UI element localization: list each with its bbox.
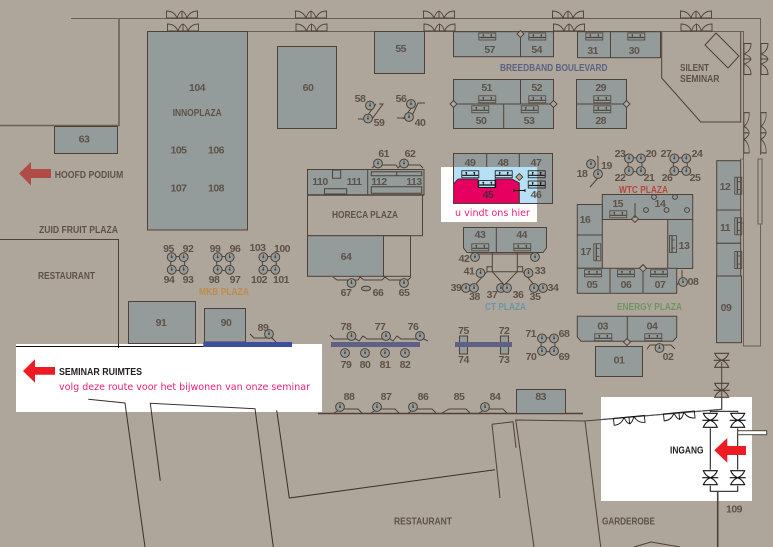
cluster 92 to 95: 92 — [183, 243, 194, 255]
stands 76 to 82: 80 — [360, 359, 371, 371]
cluster 100 to 103: 102 — [251, 274, 268, 286]
cluster 96 to 99: 99 — [210, 243, 221, 255]
stands 58 and 59: 58 — [355, 93, 366, 105]
stand: Innoplaza — [148, 32, 248, 230]
stands 65 66 67: 66 — [373, 287, 384, 299]
arrow: ingang — [714, 438, 746, 463]
stands 57 and 54: 54 — [531, 44, 543, 56]
stands 29 and 28: 29 — [595, 82, 607, 94]
stands 72 to 75: 75 — [458, 325, 469, 337]
stands 72 to 75: 72 — [499, 325, 510, 337]
label: breedband boulevard: BREEDBAND BOULEVARD — [500, 62, 608, 74]
CT plaza stands 33 to 42: 41 — [464, 266, 475, 278]
cluster 68 to 71: 71 — [525, 328, 537, 340]
WTC plaza stands 13 to 17: 17 — [580, 246, 592, 258]
cluster 92 to 95: 95 — [163, 243, 174, 255]
CT plaza stands 33 to 42: 34 — [548, 282, 559, 294]
CT plaza stands 33 to 42: 42 — [459, 253, 470, 265]
cluster 96 to 99: 97 — [230, 274, 241, 286]
WTC plaza stands 13 to 17: 16 — [580, 214, 591, 226]
stands 29 and 28: 28 — [595, 115, 607, 127]
stands 45 to 49 block: 47 — [531, 157, 542, 169]
cluster 68 to 71 — [525, 328, 570, 363]
CT plaza stands 33 to 42: 38 — [469, 291, 480, 303]
stands 76 to 82 — [330, 321, 428, 371]
stands 57 and 54: 57 — [484, 44, 496, 56]
cluster 20 to 23: 22 — [615, 172, 626, 184]
label: ingang: INGANG — [670, 445, 704, 457]
label: CT plaza: CT PLAZA — [485, 301, 526, 313]
stands 58 and 59 — [355, 93, 385, 129]
stands 72 to 75 — [455, 325, 512, 366]
entrance structure — [613, 411, 767, 491]
stands 18 and 19: 18 — [577, 168, 588, 180]
cluster 96 to 99 — [209, 243, 241, 286]
cluster 100 to 103: 100 — [274, 243, 291, 255]
stands 45 to 49 block: 45 — [483, 189, 494, 201]
stands 72 to 75: 74 — [458, 354, 469, 366]
stand 01: 01 — [614, 354, 625, 366]
silent seminar room: SEMINAR — [680, 73, 720, 85]
stands 03 and 04 — [577, 316, 677, 346]
revolving doors right side — [744, 43, 768, 154]
panel: ingang white highlight — [601, 397, 752, 501]
route walls below seminar panel — [88, 399, 495, 547]
cluster 20 to 23: 20 — [646, 148, 657, 160]
stands 18 and 19: 19 — [601, 160, 612, 172]
label: seminar ruimtes: SEMINAR RUIMTES — [59, 366, 142, 378]
stands 84 to 88 — [334, 391, 507, 413]
stands 110 to 113 strip — [308, 170, 424, 195]
CT plaza stands 33 to 42: 37 — [487, 289, 498, 301]
stands 45 to 49 block — [454, 154, 552, 204]
stand: Innoplaza: 104 — [189, 82, 206, 94]
stands 65 66 67: 65 — [399, 287, 410, 299]
stands 110 to 113 strip: 113 — [406, 176, 422, 188]
stand 55 — [374, 32, 424, 74]
stands 76 to 82: 76 — [408, 321, 419, 333]
WTC plaza stands 13 to 17: 15 — [612, 198, 624, 210]
stands 09 to 12 column: 12 — [720, 181, 731, 193]
white panel: seminar ruimtes — [16, 344, 322, 412]
stand 63: 63 — [79, 134, 90, 146]
Horeca plaza: HORECA PLAZA — [332, 209, 398, 221]
stands 50 51 52 53: 52 — [531, 82, 543, 94]
cluster 24 to 27: 25 — [690, 172, 701, 184]
stand: Innoplaza: 106 — [208, 144, 225, 156]
cluster 100 to 103: 101 — [273, 274, 290, 286]
stand 64: 64 — [341, 251, 352, 263]
panel: stand 45 white highlight — [441, 167, 537, 222]
cluster 92 to 95: 94 — [164, 274, 175, 286]
stand: Innoplaza: 107 — [170, 182, 187, 194]
stand 55: 55 — [395, 43, 407, 55]
stands 05 06 07: 06 — [621, 279, 632, 291]
stands 58 and 59: 59 — [374, 117, 385, 129]
stands 05 06 07 — [577, 265, 677, 293]
CT plaza stands 33 to 42: 35 — [530, 291, 541, 303]
label: energy plaza: ENERGY PLAZA — [617, 301, 682, 313]
stand 01 — [596, 346, 642, 376]
stand 60 — [278, 46, 336, 128]
cluster 20 to 23 — [615, 148, 657, 184]
label: restaurant south: RESTAURANT — [394, 515, 452, 527]
stands 05 06 07: 05 — [587, 279, 598, 291]
stands 45 to 49 block: 49 — [465, 157, 476, 169]
stands 84 to 88: 88 — [344, 391, 355, 403]
stands 61 and 62: 61 — [378, 148, 390, 160]
entrance doors grey — [714, 353, 730, 397]
stands 43 and 44: 43 — [475, 229, 486, 241]
cluster 20 to 23: 23 — [615, 148, 626, 160]
label: MKB plaza: MKB PLAZA — [199, 286, 249, 298]
stands 18 and 19 — [577, 156, 612, 187]
stand: Innoplaza: 105 — [170, 144, 187, 156]
label: garderobe: GARDEROBE — [602, 515, 655, 527]
cluster 24 to 27 — [661, 148, 703, 184]
stands 110 to 113 strip: 112 — [371, 176, 387, 188]
stands 65 66 67: 67 — [341, 287, 352, 299]
blue bar at stand 90 — [203, 342, 292, 347]
CT plaza stands 33 to 42 — [451, 253, 559, 303]
cluster 92 to 95: 93 — [183, 274, 194, 286]
stand 109 corridor: 109 — [726, 504, 743, 516]
stand 08: 08 — [688, 276, 699, 288]
entrance wall line over white panel — [601, 397, 722, 420]
stand 89 — [250, 322, 276, 342]
black wall line over panel — [16, 344, 204, 348]
stands 09 to 12 column: 09 — [721, 302, 732, 314]
stand 45 highlighted — [454, 179, 519, 204]
stands 84 to 88: 85 — [454, 391, 465, 403]
stands 09 to 12 column — [716, 161, 742, 343]
label: seminar route hint: volg deze route voor het bijwonen van onze seminar — [59, 382, 310, 393]
stand 83 — [516, 390, 566, 414]
stands 110 to 113 strip: 110 — [312, 176, 328, 188]
silent seminar room: SILENT — [680, 62, 709, 74]
cluster 24 to 27: 26 — [662, 172, 673, 184]
stands 76 to 82: 78 — [341, 321, 352, 333]
stand 91 — [128, 302, 196, 344]
Horeca plaza — [308, 195, 422, 236]
stands 05 06 07: 07 — [655, 279, 666, 291]
cluster 68 to 71: 69 — [559, 351, 570, 363]
stands 29 and 28 — [576, 80, 630, 128]
cluster 24 to 27: 27 — [661, 148, 672, 160]
cluster 24 to 27: 24 — [692, 148, 703, 160]
stands 76 to 82: 81 — [380, 359, 391, 371]
stands 57 and 54 — [454, 30, 554, 57]
stands 76 to 82: 77 — [375, 321, 386, 333]
stand: Innoplaza: 108 — [208, 182, 225, 194]
label: zuid fruit plaza: ZUID FRUIT PLAZA — [39, 224, 118, 236]
stand 60: 60 — [303, 82, 314, 94]
WTC plaza stands 13 to 17 — [577, 194, 693, 272]
stand 91: 91 — [156, 317, 167, 329]
stand 90 — [204, 308, 246, 342]
cluster 68 to 71: 68 — [559, 328, 570, 340]
stands 03 and 04: 03 — [597, 320, 609, 332]
CT plaza stands 33 to 42: 39 — [451, 282, 462, 294]
label: hoofd podium: HOOFD PODIUM — [55, 169, 123, 181]
stands 56 and 40: 40 — [415, 117, 426, 129]
stands 31 and 30: 31 — [587, 45, 599, 57]
stand 90: 90 — [221, 317, 232, 329]
stands 50 51 52 53: 51 — [481, 82, 493, 94]
CT plaza stands 33 to 42: 33 — [535, 265, 546, 277]
WTC plaza stands 13 to 17: 14 — [655, 198, 666, 210]
revolving doors top row — [166, 11, 712, 31]
arrow: seminar route — [23, 359, 55, 383]
stands 84 to 88: 87 — [381, 391, 392, 403]
stand 109 corridor — [718, 491, 743, 547]
stand 83: 83 — [535, 391, 547, 403]
stands 09 to 12 column: 11 — [720, 222, 731, 234]
label: WTC plaza: WTC PLAZA — [619, 184, 668, 196]
stands 76 to 82: 79 — [341, 359, 352, 371]
cluster 20 to 23: 21 — [644, 172, 655, 184]
cluster 68 to 71: 70 — [526, 351, 537, 363]
stands 110 to 113 strip: 111 — [347, 176, 362, 188]
stands 76 to 82: 82 — [400, 359, 411, 371]
arrow: hoofd podium — [19, 162, 51, 186]
stand 02 — [647, 344, 675, 363]
CT plaza stands 33 to 42: 36 — [513, 289, 524, 301]
label: restaurant west: RESTAURANT — [38, 270, 95, 282]
stands 61 and 62: 62 — [405, 148, 416, 160]
stand: Innoplaza: INNOPLAZA — [173, 107, 222, 119]
cluster 96 to 99: 98 — [209, 274, 220, 286]
stand 08 — [677, 270, 699, 288]
cluster 96 to 99: 96 — [230, 243, 241, 255]
stands 50 51 52 53: 53 — [524, 115, 535, 127]
stands 56 and 40 — [396, 93, 426, 129]
cluster 92 to 95 — [163, 243, 194, 286]
stands 43 and 44: 44 — [516, 229, 528, 241]
stands 72 to 75: 73 — [499, 354, 510, 366]
stands 03 and 04: 04 — [647, 320, 658, 332]
stands 31 and 30: 30 — [629, 45, 640, 57]
stands 65 66 67 — [333, 277, 411, 299]
stands 31 and 30 — [578, 32, 660, 58]
stands 84 to 88: 86 — [418, 391, 429, 403]
cluster 100 to 103 — [249, 242, 291, 286]
stand 89: 89 — [258, 322, 269, 334]
stands 43 and 44 — [464, 228, 546, 252]
cluster 100 to 103: 103 — [249, 242, 266, 254]
silent seminar room — [662, 32, 741, 122]
stand 63 — [54, 126, 118, 154]
stands 50 51 52 53: 50 — [476, 115, 487, 127]
stands 50 51 52 53 — [450, 80, 557, 128]
stands 61 and 62 — [372, 148, 423, 168]
stands 84 to 88: 84 — [490, 391, 501, 403]
stand 02: 02 — [663, 351, 674, 363]
WTC plaza stands 13 to 17: 13 — [679, 240, 690, 252]
stands 56 and 40: 56 — [396, 93, 407, 105]
label: u vindt ons hier: u vindt ons hier — [455, 208, 530, 219]
stands 45 to 49 block: 48 — [498, 157, 509, 169]
stands 45 to 49 block: 46 — [531, 189, 542, 201]
stand 64 — [308, 236, 410, 276]
